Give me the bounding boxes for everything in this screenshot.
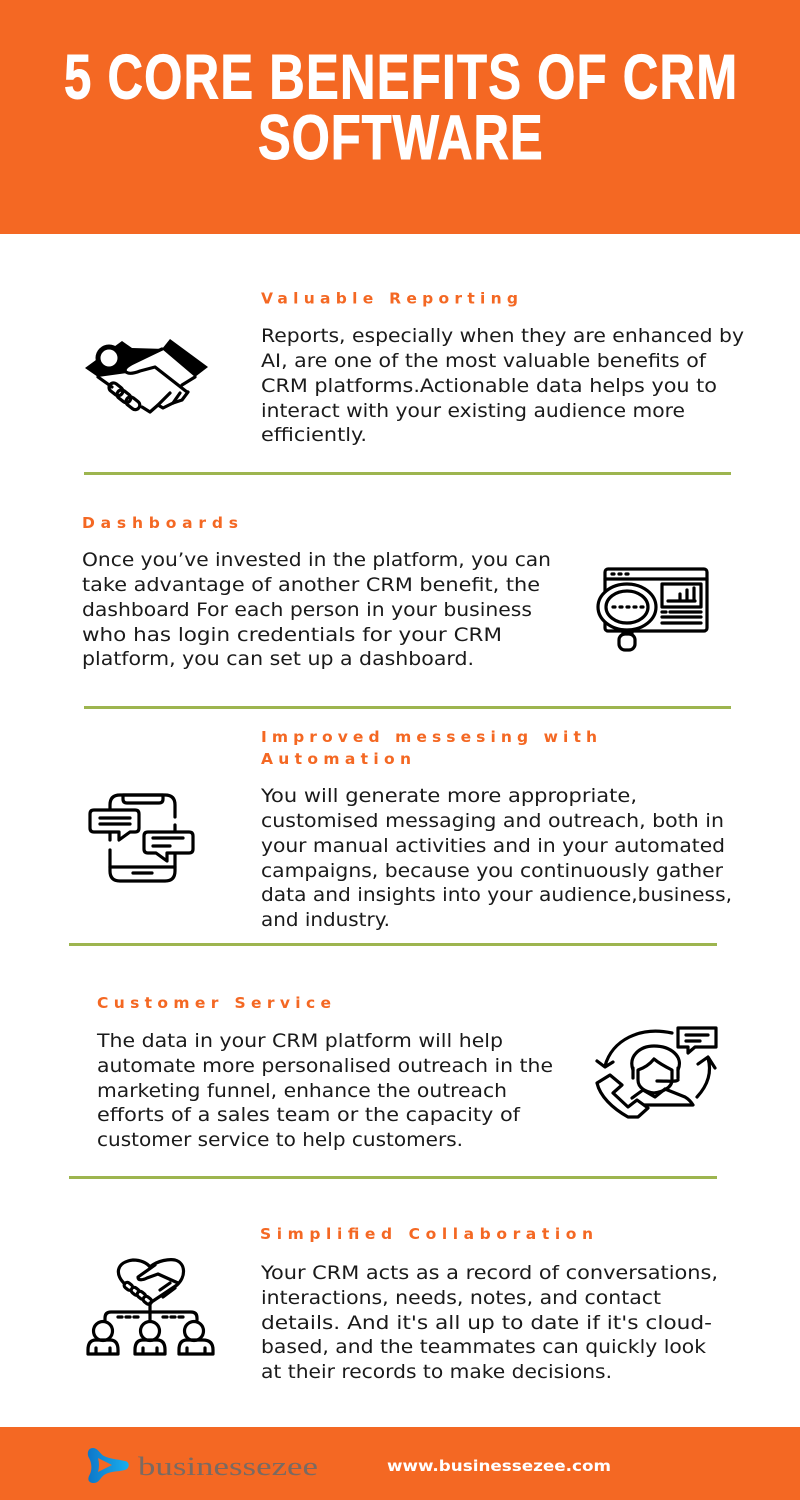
- title: 5 CORE BENEFITS OF CRM: [64, 42, 737, 112]
- text: messaging: data and insights into your audience,business,: [261, 884, 732, 906]
- heading: Customer Service: Customer Service: [97, 994, 331, 1012]
- text: reporting: interact with your existing audience more: [261, 400, 685, 422]
- text: collaboration: interactions, needs, notes, and contact: [261, 1287, 661, 1309]
- website url: www.businessezee.com: [387, 1457, 611, 1475]
- text: messaging: your manual activities and in your automated: [261, 835, 725, 857]
- text: dashboards: who has login credentials for your CRM: [82, 624, 502, 646]
- text: customer service: efforts of a sales team or the capacity of: [97, 1104, 521, 1126]
- text: collaboration: details. And it's all up to date if it's cloud-: [261, 1312, 712, 1334]
- text: reporting: efficiently.: [261, 424, 367, 446]
- text: collaboration: [260, 1262, 718, 1383]
- icon: dashboard with magnifier: [598, 569, 707, 650]
- heading: Dashboards: Dashboards: [82, 514, 238, 532]
- icon: handshake: [85, 339, 208, 412]
- logo: businessezee: businessezee: [138, 1452, 318, 1481]
- title: [64, 42, 737, 172]
- heading: Improved messesing with Automation: Improved messesing with: [261, 728, 597, 746]
- text: collaboration: at their records to make decisions.: [261, 1361, 612, 1383]
- text: customer service: [96, 1030, 553, 1151]
- text: messaging: customised messaging and outreach, both in: [261, 810, 724, 832]
- heading: Improved messesing with Automation: [261, 728, 597, 768]
- text: reporting: Reports, especially when they are enhanced by: [261, 325, 744, 347]
- text: dashboards: take advantage of another CRM benefit, the: [82, 574, 540, 596]
- text: dashboards: [82, 549, 551, 670]
- header band: [0, 0, 800, 234]
- text: customer service: customer service to help customers.: [97, 1129, 463, 1151]
- heading: Simplified Collaboration: Simplified Collaboration: [260, 1225, 593, 1243]
- text: messaging: You will generate more appropriate,: [260, 785, 637, 807]
- text: customer service: marketing funnel, enhance the outreach: [97, 1080, 507, 1102]
- text: customer service: The data in your CRM platform will help: [96, 1030, 503, 1052]
- heading: Valuable Reporting: Valuable Reporting: [261, 290, 518, 308]
- text: messaging: and industry.: [261, 909, 390, 931]
- icon: customer service agent: [597, 1028, 716, 1117]
- text: messaging: [260, 785, 732, 931]
- footer band: [0, 1427, 800, 1500]
- text: dashboards: dashboard For each person in your business: [82, 599, 532, 621]
- text: collaboration: Your CRM acts as a record of conversations,: [260, 1262, 718, 1284]
- text: dashboards: platform, you can set up a dashboard.: [82, 648, 474, 670]
- text: reporting: AI, are one of the most valuable benefits of: [261, 350, 707, 372]
- icon: phone with chat bubbles: [90, 795, 193, 881]
- text: dashboards: Once you’ve invested in the platform, you can: [82, 549, 551, 571]
- title: SOFTWARE: [258, 102, 543, 172]
- text: customer service: automate more personalised outreach in the: [97, 1055, 553, 1077]
- text: messaging: campaigns, because you continuously gather: [261, 860, 723, 882]
- icon: team and handshake heart: [88, 1260, 213, 1354]
- logo: businessezee: [88, 1448, 318, 1483]
- text: reporting: [261, 325, 744, 446]
- heading: Improved messesing with Automation: Automation: [261, 750, 411, 768]
- text: collaboration: based, and the teammates can quickly look: [261, 1336, 706, 1358]
- text: reporting: CRM platforms.Actionable data helps you to: [261, 375, 717, 397]
